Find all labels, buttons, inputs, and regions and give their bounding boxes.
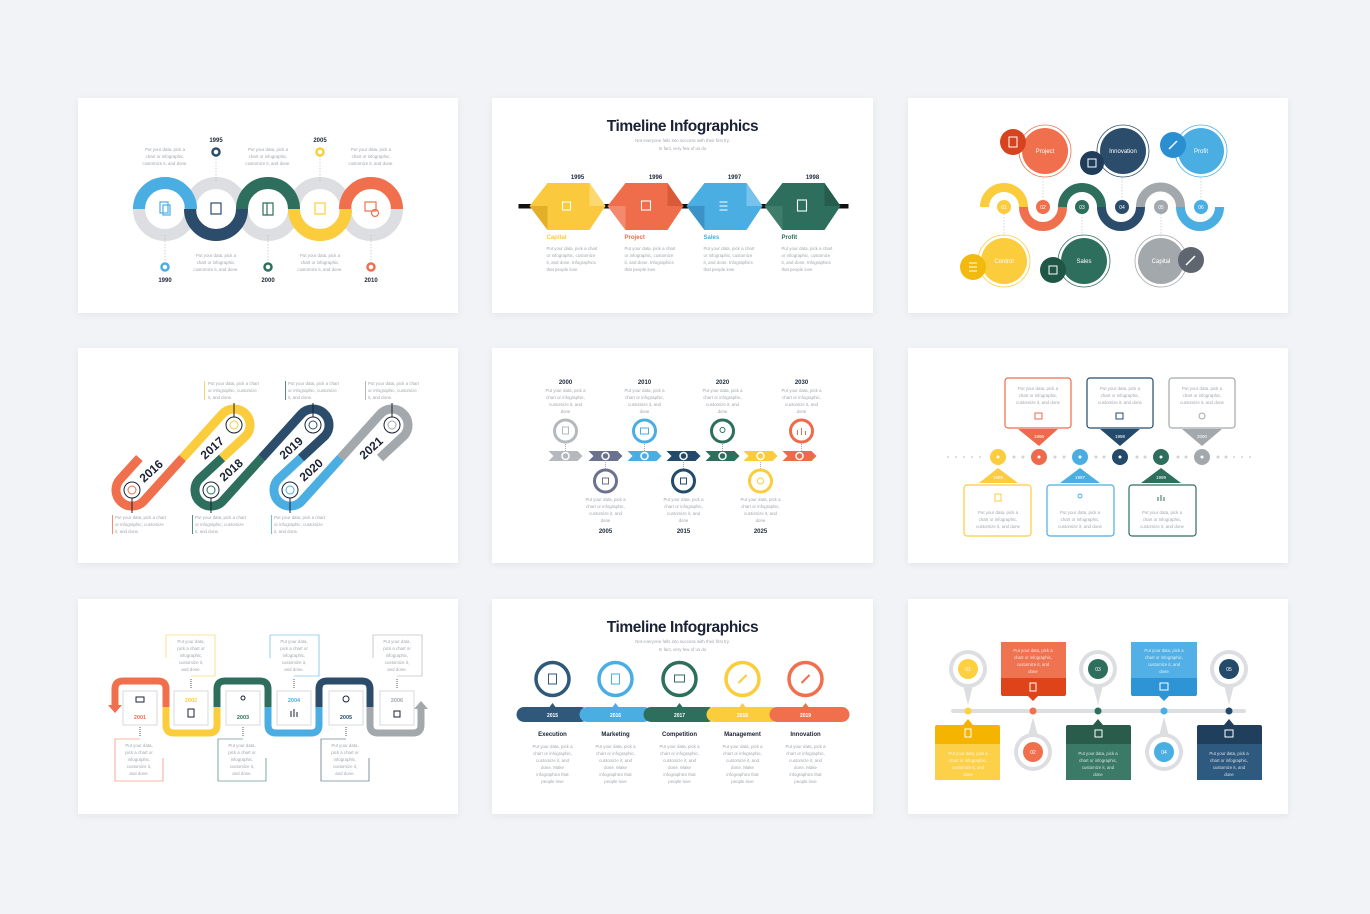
panel: circle bar timeline: chart or infographic, [596, 751, 635, 756]
texts: chart or infographic, [586, 504, 625, 509]
panel: circle bar timeline: people love [604, 779, 627, 784]
panel: box callout timeline: chart or infographic, [1183, 393, 1221, 398]
panel: circle wave timeline [78, 98, 458, 313]
panel: pin and box timeline: customize it, and [952, 765, 985, 770]
panel: circle bar timeline: customize it, and [789, 758, 823, 763]
panel: pin and box timeline: 01 [965, 667, 971, 673]
panel: circle bar timeline: Marketing [601, 732, 630, 738]
panel: hexagon timeline: Put your data, pick a chart [624, 246, 676, 251]
texts: 2025 [754, 529, 768, 535]
texts: Put your data, pick a [545, 388, 586, 393]
panel: circle wave timeline: Put your data, pick a [300, 253, 341, 258]
panel: snake box timeline: and done. [284, 667, 304, 672]
bubbles: Sales [1076, 259, 1092, 265]
notes: it, and done. [115, 529, 139, 534]
panel: snake box timeline: 2001 [134, 715, 146, 721]
panel: circle bar timeline: chart or infographic, [533, 751, 572, 756]
panel: pin and box timeline: Put your data, pick a [1078, 751, 1118, 756]
texts: 2000 [559, 380, 573, 386]
notes: or infographic, customize [368, 388, 417, 393]
panel: circle bar timeline: people love [731, 779, 754, 784]
panel: pin and box timeline: chart or infographic, [1145, 655, 1183, 660]
panel: snake box timeline: Put your data, [125, 743, 153, 748]
labels: Project [624, 235, 645, 241]
panel: circle bar timeline: Competition [662, 732, 697, 738]
circles [536, 662, 822, 696]
panel: circle bar timeline: Put your data, pick a [785, 744, 826, 749]
panel: circle bar timeline: 2016 [610, 713, 621, 719]
arrows [108, 705, 122, 713]
panel: circle bar timeline: 2019 [800, 713, 811, 719]
panel: snake box timeline: pick a chart or [125, 750, 153, 755]
panel: bubble wave: 01 [1001, 205, 1007, 211]
bubbles: Project [1036, 149, 1055, 155]
notes: or infographic, customize [115, 522, 164, 527]
icons [160, 202, 378, 216]
panel: circle bar timeline: chart or infographic, [723, 751, 762, 756]
panel: snake box timeline: pick a chart or [383, 646, 411, 651]
panel: circle bar timeline: done. Make [668, 765, 692, 770]
panel: pin and box timeline: done [963, 772, 973, 777]
texts: 2020 [716, 380, 730, 386]
panel: circle bar timeline: Put your data, pick a [595, 744, 636, 749]
panel: box callout timeline: 1997 [1075, 475, 1086, 480]
panel: snake box timeline: customize it, [127, 764, 151, 769]
panel: snake box timeline: 2004 [288, 698, 301, 704]
panel: circle wave timeline: 2000 [261, 278, 275, 284]
panel: bubble wave: 02 [1040, 205, 1046, 211]
panel: circle wave timeline: customize it, and done. [297, 267, 343, 272]
panel: snake box timeline: Put your data, [383, 639, 411, 644]
bar [516, 707, 850, 722]
year labels: 2020 [297, 456, 326, 484]
bubbles: Profit [1194, 149, 1208, 155]
panel: snake box timeline: 2006 [391, 698, 403, 704]
colored ring halves [139, 183, 397, 235]
panel: snake box timeline: 2002 [185, 698, 197, 704]
panel: snake box timeline: pick a chart or [228, 750, 256, 755]
panel: circle bar timeline: infographics that [789, 772, 822, 777]
panel: hexagon timeline: Put your data, pick a chart [704, 246, 755, 251]
panel: diagonal pill timeline [78, 348, 458, 563]
title [607, 619, 758, 652]
icons and connectors [124, 403, 400, 513]
wave [984, 187, 1220, 226]
notes: Put your data, pick a chart [274, 515, 326, 520]
panel: circle bar timeline: chart or infographic, [786, 751, 825, 756]
panel: circle bar timeline: done. Make [794, 765, 818, 770]
panel: circle bar timeline: customize it, and [536, 758, 570, 763]
panel: circle bar timeline: 2015 [547, 713, 558, 719]
notes: or infographic, customize [288, 388, 337, 393]
panel: circle wave timeline: 1995 [209, 138, 223, 144]
panel: box callout timeline: customize it, and done [1140, 524, 1185, 529]
panel: circle bar timeline: customize it, and [726, 758, 760, 763]
panel: circle bar timeline: customize it, and [599, 758, 633, 763]
panel: box callout timeline: customize it, and done [976, 524, 1021, 529]
panel: circle wave timeline: chart or infographic, [146, 154, 184, 159]
panel: pin and box timeline: customize it, and [1082, 765, 1115, 770]
notes: Put your data, pick a chart [115, 515, 167, 520]
texts: Put your data, pick a [702, 388, 743, 393]
title: Not everyone falls into success with their first try. [635, 138, 730, 143]
year labels: 2021 [357, 434, 386, 462]
panel: hexagon timeline: that people love [704, 267, 735, 272]
panel: hexagon timeline: 1996 [649, 175, 663, 181]
texts: chart or infographic, [741, 504, 780, 509]
panel: box callout timeline: 2000 [1197, 434, 1208, 439]
panel: snake box timeline: infographic, [283, 653, 305, 658]
panel: pin and box timeline: Put your data, pick a [948, 751, 988, 756]
title: Timeline Infographics [607, 118, 758, 135]
texts: done [601, 518, 611, 523]
notes: it, and done. [195, 529, 219, 534]
notes: it, and done. [274, 529, 298, 534]
panel: circle bar timeline: 2018 [737, 713, 748, 719]
panel: hexagon timeline: that people love [624, 267, 656, 272]
panel: snake box timeline: customize it, [230, 764, 254, 769]
notes: Put your data, pick a chart [195, 515, 247, 520]
panel: snake box timeline: infographic, [180, 653, 202, 658]
panel: snake box timeline: infographic, [386, 653, 408, 658]
chevrons [548, 451, 816, 461]
panel: snake box timeline: and done. [181, 667, 201, 672]
panel: hexagon timeline: or infographic, customize [782, 253, 831, 258]
panel: circle bar timeline: Put your data, pick a [659, 744, 700, 749]
panel: circle wave timeline: Put your data, pick a [351, 147, 392, 152]
labels: Capital [546, 235, 567, 241]
panel: circle bar timeline: done. Make [731, 765, 755, 770]
panel: circle bar timeline: people love [541, 779, 564, 784]
panel: box callout timeline: Put your data, pick a [1060, 510, 1101, 515]
texts: customize it, and [744, 511, 778, 516]
notes: or infographic, customize [208, 388, 257, 393]
panel: box callout timeline: customize it, and done [1180, 400, 1225, 405]
panel: hexagon timeline: Put your data, pick a chart [546, 246, 598, 251]
labels [546, 235, 797, 241]
panel: circle bar timeline: infographics that [663, 772, 696, 777]
panel: circle wave timeline: Put your data, pick a [196, 253, 237, 258]
panel: circle bar timeline: Execution [538, 732, 567, 738]
panel: snake box timeline: customize it, [385, 660, 409, 665]
year labels: 2019 [277, 434, 306, 462]
panel: circle wave timeline: customize it, and done. [142, 161, 188, 166]
panel: hexagon timeline: that people love [782, 267, 813, 272]
panel: snake box timeline: 2005 [340, 715, 352, 721]
panel: bubble wave: 03 [1079, 205, 1085, 211]
panel: bubble wave: 06 [1198, 205, 1204, 211]
panel: box callout timeline: customize it, and done [1058, 524, 1103, 529]
panel: pin and box timeline: chart or infographic, [1079, 758, 1117, 763]
callouts [115, 635, 422, 781]
year labels: 2018 [217, 456, 246, 484]
panel: circle wave timeline: 2010 [364, 278, 378, 284]
panel: snake box timeline: customize it, [179, 660, 203, 665]
texts: 2005 [599, 529, 613, 535]
bubbles: Capital [1152, 259, 1170, 265]
panel: hexagon timeline: or infographic, customize [704, 253, 753, 258]
panel: pin and box timeline: done [1224, 772, 1234, 777]
title: In fact, very few of us do [659, 146, 707, 151]
hexagons [530, 183, 840, 230]
texts: chart or infographic, [625, 395, 664, 400]
texts: chart or infographic, [703, 395, 742, 400]
panel: box callout timeline: chart or infographic, [1061, 517, 1099, 522]
panel: pin and box timeline: customize it, and [1148, 662, 1181, 667]
panel: snake box timeline: Put your data, [280, 639, 308, 644]
panel: circle bar timeline: infographics that [536, 772, 569, 777]
panel: box callout timeline: Put your data, pick a [1018, 386, 1059, 391]
panel: snake box timeline: and done. [232, 771, 252, 776]
panel: circle bar timeline: Put your data, pick a [532, 744, 573, 749]
panel: chevron timeline [492, 348, 873, 563]
panel: snake box timeline: infographic, [231, 757, 253, 762]
panel: circle bar timeline: Put your data, pick a [722, 744, 763, 749]
panel: circle bar timeline: customize it, and [663, 758, 697, 763]
panel: box callout timeline: customize it, and done [1098, 400, 1143, 405]
top boxes [964, 378, 1235, 536]
title [607, 118, 758, 151]
panel: pin and box timeline: Put your data, pick a [1209, 751, 1249, 756]
panel: box callout timeline: chart or infographic, [1101, 393, 1139, 398]
panel: snake box timeline: customize it, [333, 764, 357, 769]
texts: done [756, 518, 766, 523]
title: Not everyone falls into success with their first try. [635, 639, 730, 644]
panel: pin and box timeline: 05 [1226, 667, 1232, 673]
panel: pin and box timeline: customize it, and [1213, 765, 1246, 770]
panel: circle wave timeline: chart or infographic, [301, 260, 339, 265]
panel: hexagon timeline: Put your data, pick a chart [782, 246, 833, 251]
panel: circle wave timeline: chart or infographic, [352, 154, 390, 159]
notes: Put your data, pick a chart [368, 381, 420, 386]
notes: Put your data, pick a chart [288, 381, 340, 386]
texts: customize it, and [549, 402, 583, 407]
panel: hexagon timeline: or infographic, customize [546, 253, 596, 258]
bubbles: Innovation [1109, 149, 1137, 155]
notes [112, 381, 420, 534]
texts: 2010 [638, 380, 652, 386]
panel: snake box timeline: infographic, [334, 757, 356, 762]
texts: chart or infographic, [664, 504, 703, 509]
labels: Sales [704, 235, 720, 241]
panel: pin and box timeline: Put your data, pick a [1013, 648, 1053, 653]
panel: snake box timeline: pick a chart or [177, 646, 205, 651]
texts: done [640, 409, 650, 414]
year labels [137, 434, 386, 485]
texts: Put your data, pick a [740, 497, 781, 502]
panel: snake box timeline: and done. [335, 771, 355, 776]
texts: done [679, 518, 689, 523]
panel: circle bar timeline: chart or infographic, [660, 751, 699, 756]
panel: pin and box timeline [908, 599, 1288, 814]
panel: hexagon timeline: 1998 [806, 175, 820, 181]
panel: circle wave timeline: Put your data, pick a [248, 147, 289, 152]
panel: pin and box timeline: chart or infographic, [949, 758, 987, 763]
panel: box callout timeline: Put your data, pick a [978, 510, 1019, 515]
texts: Put your data, pick a [781, 388, 822, 393]
notes: it, and done. [208, 395, 232, 400]
boxes [935, 642, 1262, 780]
panel: circle bar timeline: people love [668, 779, 691, 784]
texts: Put your data, pick a [663, 497, 704, 502]
panel: pin and box timeline: done [1093, 772, 1103, 777]
panel: snake box timeline: and done. [129, 771, 149, 776]
panel: pin and box timeline: customize it, and [1017, 662, 1050, 667]
notes: or infographic, customize [274, 522, 323, 527]
panel: snake box timeline [78, 599, 458, 814]
panel: pin and box timeline: 02 [1030, 750, 1036, 756]
panel: box callout timeline: chart or infographic, [979, 517, 1017, 522]
texts [545, 380, 822, 535]
panel: snake box timeline: Put your data, [228, 743, 256, 748]
panel: box callout timeline: 1998 [1115, 434, 1126, 439]
panel: circle bar timeline [492, 599, 873, 814]
bubbles [960, 125, 1227, 287]
panel: pin and box timeline: Put your data, pick a [1144, 648, 1184, 653]
title: In fact, very few of us do [659, 647, 707, 652]
labels: Profit [782, 235, 797, 241]
panel: pin and box timeline: done [1159, 669, 1169, 674]
panel: pin and box timeline: chart or infographic, [1014, 655, 1052, 660]
texts: customize it, and [628, 402, 662, 407]
texts: customize it, and [667, 511, 701, 516]
panel: hexagon timeline: it, and done. Infographics [546, 260, 597, 265]
panel: bubble wave: 05 [1158, 205, 1164, 211]
notes: or infographic, customize [195, 522, 244, 527]
texts: chart or infographic, [782, 395, 821, 400]
panel: hexagon timeline: 1995 [571, 175, 585, 181]
texts: Put your data, pick a [585, 497, 626, 502]
panel: circle wave timeline: 2005 [313, 138, 327, 144]
panel: circle bar timeline: infographics that [726, 772, 759, 777]
panel: circle wave timeline: Put your data, pick a [145, 147, 186, 152]
panel: box callout timeline: chart or infographic, [1019, 393, 1057, 398]
texts: 2030 [795, 380, 809, 386]
year markers [162, 148, 374, 270]
panel: box callout timeline: 1995 [993, 475, 1004, 480]
panel: snake box timeline: customize it, [282, 660, 306, 665]
year labels: 2017 [198, 434, 227, 462]
panel: circle bar timeline: done. Make [604, 765, 628, 770]
title: Timeline Infographics [607, 619, 758, 636]
panel: box callout timeline: Put your data, pick a [1100, 386, 1141, 391]
panel: bubble wave: 04 [1119, 205, 1125, 211]
panel: snake box timeline: pick a chart or [331, 750, 359, 755]
panel: hexagon timeline: that people love [546, 267, 578, 272]
panel: hexagon timeline [492, 98, 873, 313]
panel: circle bar timeline: 2017 [674, 713, 685, 719]
panel: box callout timeline: 1999 [1156, 475, 1167, 480]
panel: circle bar timeline: people love [794, 779, 817, 784]
panel: box callout timeline: customize it, and done [1016, 400, 1061, 405]
panel: circle wave timeline: chart or infographic, [197, 260, 235, 265]
texts: customize it, and [785, 402, 819, 407]
panel: box callout timeline: 1996 [1034, 434, 1045, 439]
panel: box callout timeline: Put your data, pick a [1142, 510, 1183, 515]
notes: Put your data, pick a chart [208, 381, 260, 386]
panel: pin and box timeline: 03 [1095, 667, 1101, 673]
panel: circle bar timeline: Management [724, 732, 761, 738]
panel: snake box timeline: and done. [387, 667, 407, 672]
panel: circle bar timeline: done. Make [541, 765, 565, 770]
panel: circle wave timeline: 1990 [158, 278, 172, 284]
bubbles: Control [994, 259, 1014, 265]
panel: hexagon timeline: it, and done. Infographics [704, 260, 754, 265]
texts: done [718, 409, 728, 414]
panel: hexagon timeline: or infographic, customize [624, 253, 674, 258]
panel: snake box timeline: 2003 [237, 715, 249, 721]
texts: Put your data, pick a [624, 388, 665, 393]
panel: hexagon timeline: it, and done. Infographics [782, 260, 832, 265]
panel: snake box timeline: Put your data, [177, 639, 205, 644]
notes: it, and done. [368, 395, 392, 400]
panel: pin and box timeline: chart or infographic, [1210, 758, 1248, 763]
boxes [123, 691, 414, 725]
panel: snake box timeline: pick a chart or [280, 646, 308, 651]
panel: hexagon timeline: 1997 [728, 175, 742, 181]
panel: hexagon timeline: it, and done. Infographics [624, 260, 675, 265]
panel: circle bar timeline: Innovation [790, 732, 821, 738]
panel: circle wave timeline: customize it, and done. [245, 161, 291, 166]
panel: circle wave timeline: customize it, and done. [193, 267, 239, 272]
panel: circle wave timeline: chart or infographic, [249, 154, 287, 159]
texts: done [561, 409, 571, 414]
panel: snake box timeline: Put your data, [331, 743, 359, 748]
panel: circle wave timeline: customize it, and done. [348, 161, 394, 166]
texts: 2015 [677, 529, 691, 535]
notes: it, and done. [288, 395, 312, 400]
panel: pin and box timeline: 04 [1161, 750, 1167, 756]
panel: box callout timeline: Put your data, pick a [1182, 386, 1223, 391]
circles [554, 420, 812, 492]
pins [949, 650, 1248, 771]
texts: customize it, and [706, 402, 740, 407]
texts: done [797, 409, 807, 414]
panel: pin and box timeline: done [1028, 669, 1038, 674]
panel: box callout timeline: chart or infographic, [1143, 517, 1181, 522]
texts: chart or infographic, [546, 395, 585, 400]
panel: snake box timeline: infographic, [128, 757, 150, 762]
panel: circle bar timeline: infographics that [599, 772, 632, 777]
panel: bubble wave [908, 98, 1288, 313]
panel: box callout timeline [908, 348, 1288, 563]
year labels: 2016 [137, 457, 166, 485]
texts: customize it, and [589, 511, 623, 516]
